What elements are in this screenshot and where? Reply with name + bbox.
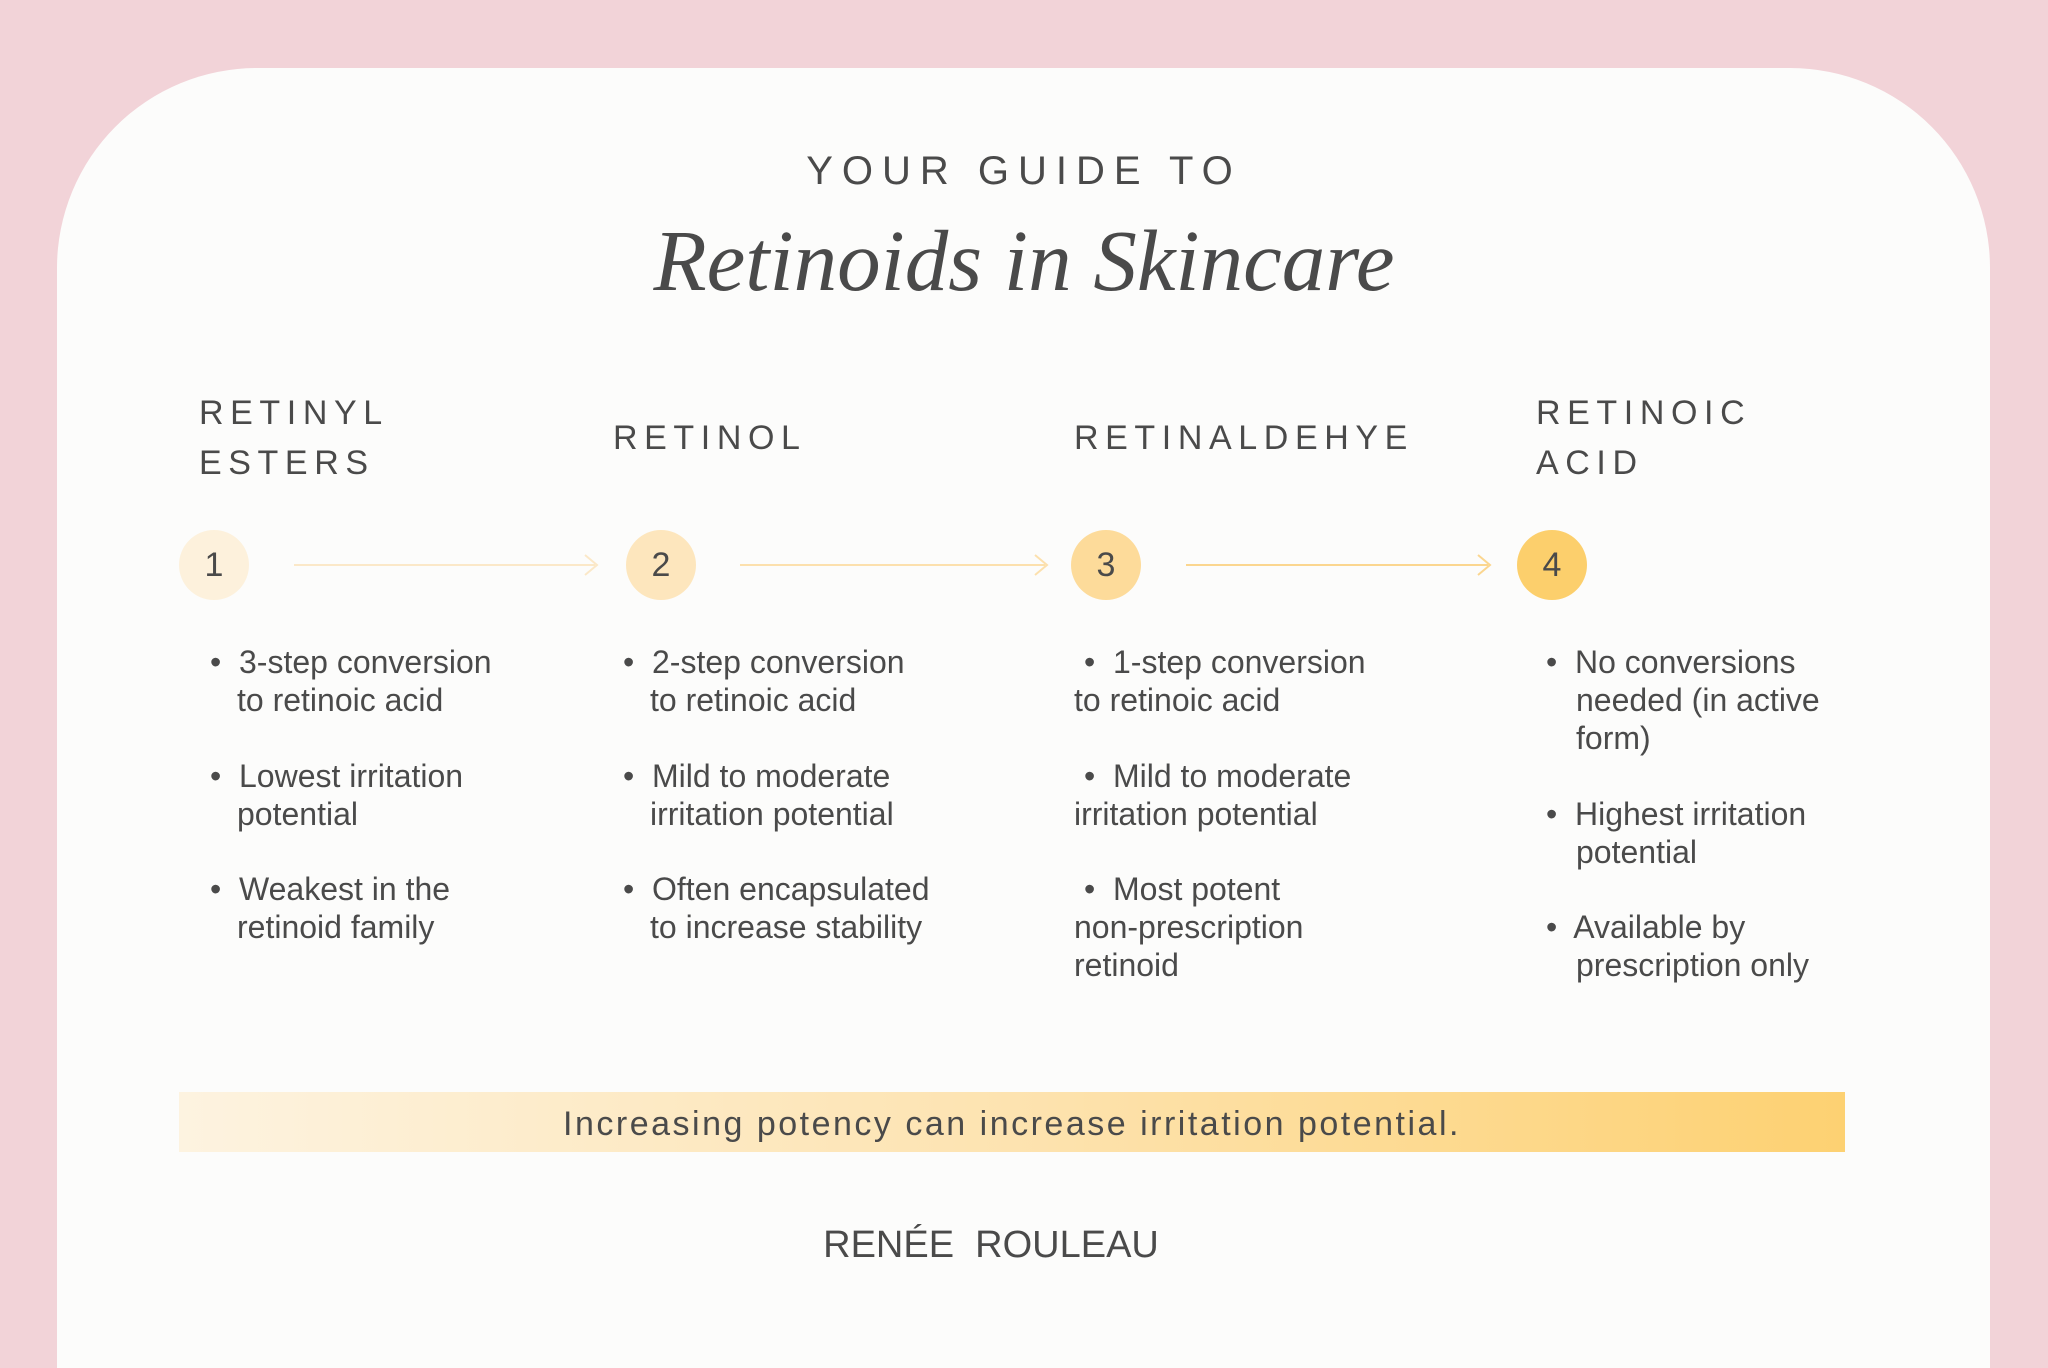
circle 1: 1	[205, 546, 223, 584]
column 1 bullets	[210, 644, 492, 945]
text: needed (in active	[1576, 682, 1820, 718]
text: retinoid	[1074, 947, 1179, 983]
logo: RENÉE ROULEAU	[823, 1224, 1159, 1266]
heading: retinyl esters: RETINYL	[199, 394, 389, 432]
circle 1	[179, 530, 249, 600]
text: • Mild to moderate	[623, 758, 890, 794]
heading: retinyl esters	[199, 394, 389, 482]
heading: retinol: RETINOL	[613, 419, 807, 457]
text: potential	[1576, 834, 1697, 870]
text: • Available by	[1546, 909, 1745, 945]
circle 3	[1071, 530, 1141, 600]
text: potential	[237, 796, 358, 832]
text: to increase stability	[650, 909, 922, 945]
text: retinoid family	[237, 909, 434, 945]
step circles and arrows	[179, 530, 1587, 600]
text: to retinoic acid	[237, 682, 443, 718]
text: to retinoic acid	[650, 682, 856, 718]
text: non-prescription	[1074, 909, 1303, 945]
title: retinoids in skincare: Retinoids in Skincare	[654, 212, 1394, 309]
heading: retinoic acid	[1536, 394, 1751, 482]
text: • Highest irritation	[1546, 796, 1806, 832]
title: your guide to: YOUR GUIDE TO	[806, 149, 1242, 193]
column 2 bullets	[623, 644, 930, 945]
arrows	[294, 554, 1492, 576]
circle 4	[1517, 530, 1587, 600]
text: • 2-step conversion	[623, 644, 905, 680]
heading: retinoic acid: ACID	[1536, 444, 1644, 482]
potency bar: Increasing potency can increase irritation potential.	[563, 1105, 1461, 1143]
circle 2	[626, 530, 696, 600]
text: irritation potential	[1074, 796, 1318, 832]
column 3 bullets	[1074, 644, 1366, 983]
text: irritation potential	[650, 796, 894, 832]
text: • Often encapsulated	[623, 871, 930, 907]
text: • Weakest in the	[210, 871, 450, 907]
circle 2: 2	[652, 546, 670, 584]
text: to retinoic acid	[1074, 682, 1280, 718]
text: • Most potent	[1084, 871, 1280, 907]
circle 3: 3	[1097, 546, 1115, 584]
column 4 bullets	[1546, 644, 1820, 983]
heading: retinoic acid: RETINOIC	[1536, 394, 1751, 432]
text: prescription only	[1576, 947, 1809, 983]
text: • No conversions	[1546, 644, 1796, 680]
heading: retinaldehye: RETINALDEHYE	[1074, 419, 1414, 457]
heading: retinyl esters: ESTERS	[199, 444, 375, 482]
text: • Lowest irritation	[210, 758, 463, 794]
circle 4: 4	[1543, 546, 1561, 584]
text: form)	[1576, 720, 1651, 756]
potency bar	[179, 1092, 1845, 1152]
text: • Mild to moderate	[1084, 758, 1351, 794]
text: • 1-step conversion	[1084, 644, 1366, 680]
text: • 3-step conversion	[210, 644, 492, 680]
